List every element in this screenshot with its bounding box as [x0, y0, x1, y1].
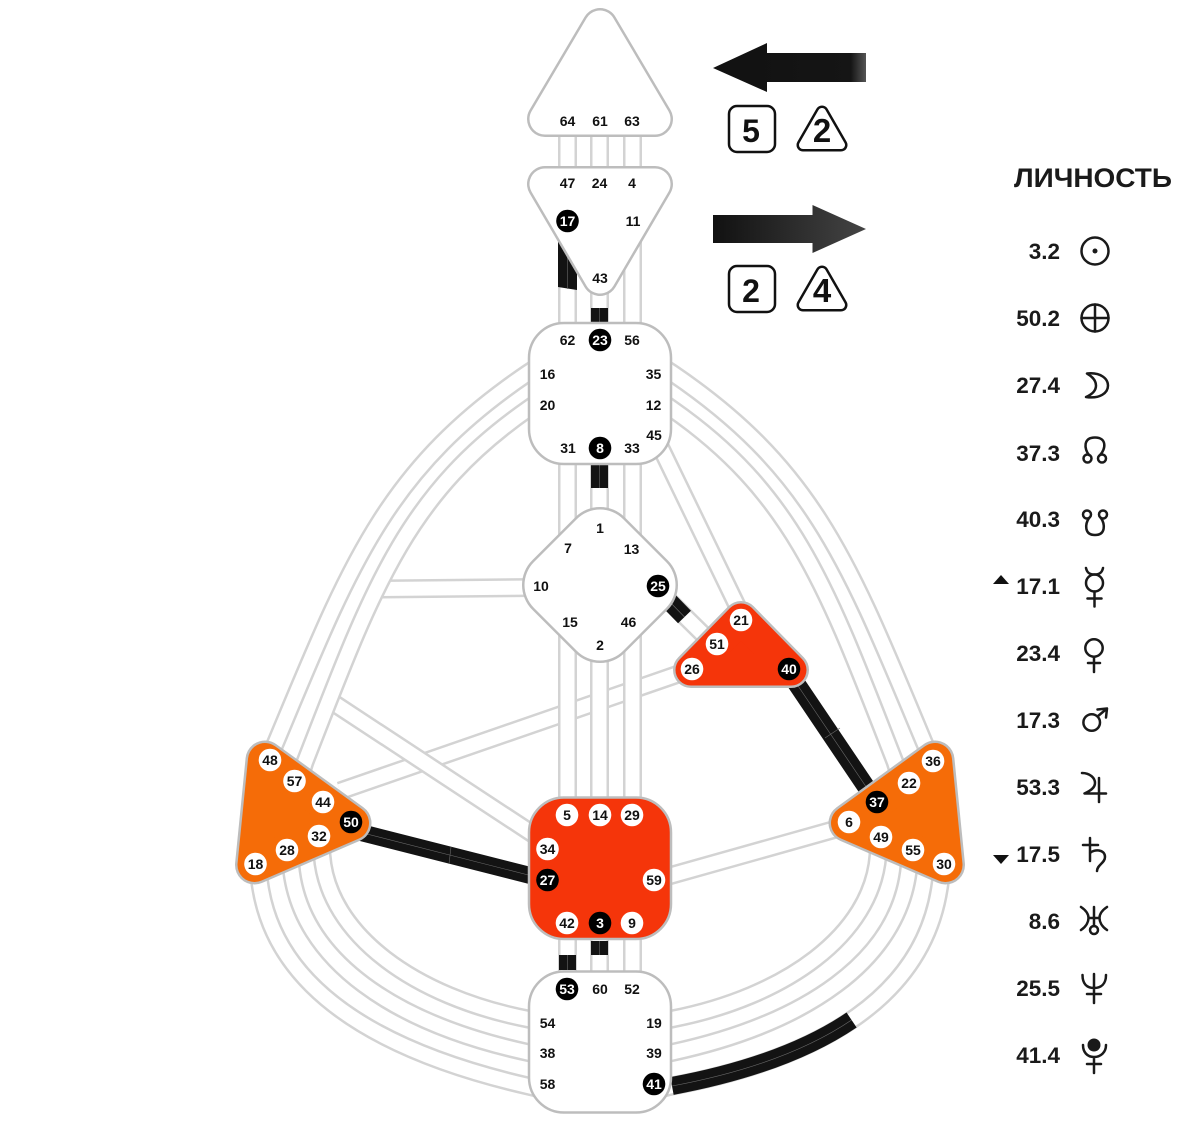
- center: solar plexus: 37: [869, 794, 885, 810]
- center: sacral: 59: [646, 872, 662, 888]
- row: pluto 41.4: [1016, 1038, 1106, 1073]
- center: heart: 21: [733, 612, 749, 628]
- center: throat: 23: [592, 332, 608, 348]
- center: solar plexus: [838, 750, 955, 875]
- center: root: 54: [540, 1015, 555, 1031]
- center: root: 58: [540, 1076, 555, 1092]
- center: G diamond: 2: [596, 637, 604, 653]
- center: solar plexus: 22: [901, 775, 917, 791]
- row: venus 23.4: 23.4: [1016, 641, 1060, 666]
- center: ajna: 17: [560, 213, 575, 229]
- row: uranus 8.6: [1029, 907, 1107, 934]
- channels: upper arcs from throat to spleen and solar plexus: [270, 362, 930, 775]
- center: throat: 56: [624, 332, 640, 348]
- badge: square 5: [729, 106, 775, 152]
- row: pluto 41.4: 41.4: [1016, 1043, 1060, 1068]
- center: head: [545, 26, 655, 129]
- center: G diamond: [533, 520, 669, 653]
- center: sacral: 34: [540, 841, 555, 857]
- center: heart: 40: [781, 661, 797, 677]
- row: moon 27.4: [1016, 373, 1108, 398]
- center: throat: 16: [540, 366, 555, 382]
- center: ajna: 47: [560, 175, 575, 191]
- center: root: 52: [624, 981, 640, 997]
- center: sacral: 42: [559, 915, 575, 931]
- row: earth 50.2: [1016, 304, 1108, 332]
- center: sacral: 9: [628, 915, 636, 931]
- center: spleen: 32: [311, 828, 327, 844]
- row: saturn 17.5 with down marker: [993, 838, 1105, 871]
- center: root: 53: [559, 981, 575, 997]
- center: throat: 62: [560, 332, 575, 348]
- center: root: 41: [646, 1076, 662, 1092]
- row: north node 37.3: [1016, 438, 1106, 466]
- row: sun 3.2: [1029, 238, 1108, 264]
- row: neptune 25.5: 25.5: [1016, 976, 1060, 1001]
- center: sacral: 14: [592, 807, 608, 823]
- arrow: left pointing: [713, 43, 866, 92]
- center: throat: 31: [560, 440, 576, 456]
- badge: triangle 4: 4: [813, 272, 832, 309]
- center: throat: [529, 323, 671, 464]
- center: sacral: 5: [563, 807, 571, 823]
- center: solar plexus: 55: [905, 842, 921, 858]
- center: G diamond: 13: [624, 541, 639, 557]
- center: sacral: 3: [596, 915, 604, 931]
- heading: personality: ЛИЧНОСТЬ: [1014, 163, 1172, 193]
- center: ajna: 4: [628, 175, 636, 191]
- center: heart: 26: [684, 661, 700, 677]
- center: heart: [681, 609, 800, 680]
- row: north node 37.3: 37.3: [1016, 441, 1060, 466]
- row: moon 27.4: 27.4: [1016, 373, 1060, 398]
- center: spleen: 44: [315, 794, 331, 810]
- center: sacral: 29: [624, 807, 640, 823]
- row: uranus 8.6: 8.6: [1029, 909, 1060, 934]
- center: sacral: [529, 798, 671, 939]
- row: mercury 17.1 with up marker: [993, 568, 1103, 606]
- center: head: 61: [592, 113, 608, 129]
- center: root: 38: [540, 1045, 555, 1061]
- center: spleen: 48: [262, 752, 278, 768]
- row: venus 23.4: [1016, 639, 1103, 672]
- row: mars 17.3: 17.3: [1016, 708, 1060, 733]
- row: earth 50.2: 50.2: [1016, 306, 1060, 331]
- row: south node 40.3: 40.3: [1016, 507, 1060, 532]
- center: throat: 33: [624, 440, 640, 456]
- center: ajna: 43: [592, 270, 608, 286]
- center: ajna: 24: [592, 175, 607, 191]
- center: spleen: [244, 749, 362, 875]
- row: mercury 17.1 with up marker: 17.1: [1016, 574, 1060, 599]
- center: sacral: 27: [540, 872, 555, 888]
- row: south node 40.3: [1016, 507, 1107, 535]
- center: solar plexus: 30: [936, 856, 952, 872]
- center: throat: 20: [540, 397, 555, 413]
- row: sun 3.2: 3.2: [1029, 239, 1060, 264]
- center: throat: 45: [646, 427, 662, 443]
- center: root: 60: [592, 981, 608, 997]
- center: spleen: 28: [279, 842, 295, 858]
- center: solar plexus: 49: [873, 829, 889, 845]
- center: G diamond: 7: [564, 540, 572, 556]
- center: root: 19: [646, 1015, 662, 1031]
- center: heart: 51: [709, 636, 725, 652]
- row: mars 17.3: [1016, 708, 1107, 733]
- center: head: 63: [624, 113, 640, 129]
- row: jupiter 53.3: [1016, 773, 1106, 802]
- center: spleen: 57: [287, 773, 302, 789]
- row: jupiter 53.3: 53.3: [1016, 775, 1060, 800]
- center: ajna: [545, 175, 655, 286]
- arrow: right pointing: [713, 205, 866, 253]
- center: G diamond: 46: [621, 614, 636, 630]
- center: ajna: 11: [626, 213, 641, 229]
- center: solar plexus: 6: [845, 814, 853, 830]
- row: neptune 25.5: [1016, 974, 1106, 1003]
- center: throat: 8: [596, 440, 604, 456]
- channels: cross connections: [326, 438, 845, 878]
- channels: lower arcs from spleen and solar plexus to root: [258, 840, 942, 1090]
- center: head: 64: [560, 113, 575, 129]
- badge: square 2: 2: [742, 273, 760, 309]
- center: solar plexus: 36: [925, 753, 941, 769]
- center: throat: 12: [646, 397, 661, 413]
- center: throat: 35: [646, 366, 661, 382]
- center: spleen: 50: [343, 814, 359, 830]
- activated channel segments in black: [355, 235, 940, 1086]
- badge: triangle 4: [803, 272, 841, 309]
- center: G diamond: 25: [650, 578, 666, 594]
- badge: square 5: 5: [742, 113, 760, 149]
- row: saturn 17.5 with down marker: 17.5: [1016, 842, 1060, 867]
- center: G diamond: 10: [533, 578, 549, 594]
- badge: square 2: [729, 266, 775, 312]
- center: root: 39: [646, 1045, 662, 1061]
- badge: triangle 2: 2: [813, 112, 831, 149]
- center: root: [529, 972, 671, 1112]
- channels: vertical bundle: [568, 120, 632, 1000]
- center: spleen: 18: [248, 856, 263, 872]
- center: G diamond: 15: [562, 614, 578, 630]
- center: G diamond: 1: [596, 520, 604, 536]
- badge: triangle 2: [803, 112, 841, 149]
